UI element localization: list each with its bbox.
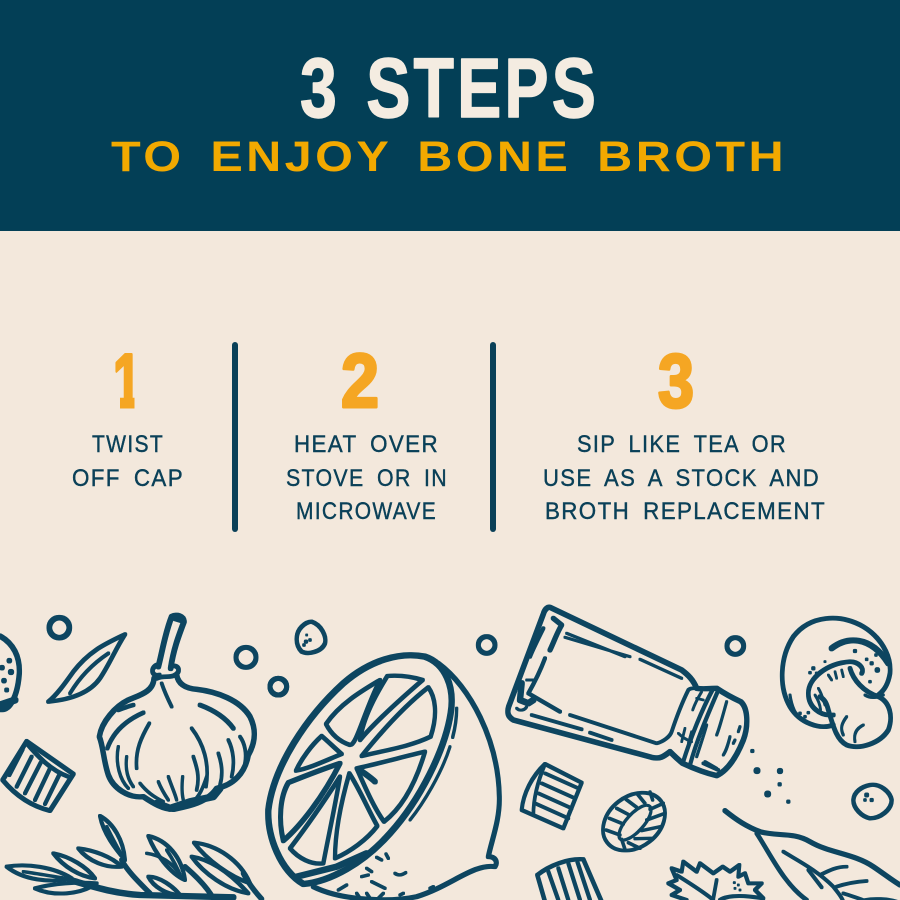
step 2: HEAT OVER (294, 431, 439, 458)
icon: pasta tube (522, 764, 582, 828)
subtitle: TO ENJOY BONE BROTH (111, 133, 787, 181)
step 3: 3 (658, 339, 694, 424)
icon: lemon slice at edge (0, 636, 19, 710)
food illustrations (0, 607, 900, 900)
icon: garlic bulb (99, 615, 254, 809)
icon: pasta ring (592, 781, 676, 863)
step 2: MICROWAVE (296, 498, 437, 525)
lemon wedges (281, 676, 435, 864)
icon: basil leaf (725, 811, 900, 900)
step 2: 2 (341, 339, 379, 424)
icon: peppercorns (236, 647, 287, 695)
icon: peppercorn (727, 638, 744, 654)
lemon flecks (338, 854, 433, 898)
icon: parsley (668, 862, 763, 900)
step 1 text: OFF CAP (72, 465, 184, 492)
divider (490, 342, 496, 532)
step 1 text (72, 431, 184, 492)
illustrations: left group (0, 615, 287, 899)
icon: salt grains (751, 749, 790, 803)
icon: peppercorn (270, 678, 287, 695)
step 3: SIP LIKE TEA OR (577, 431, 787, 458)
divider (232, 342, 238, 532)
header band (0, 0, 900, 231)
step 1 text: TWIST (92, 431, 164, 458)
icon: bay leaf (48, 634, 125, 702)
title: 3 STEPS (300, 41, 599, 135)
illustrations: lemon group (268, 622, 499, 900)
icon: mushroom (782, 618, 891, 747)
step 3 (543, 339, 826, 525)
icon: pasta piece (3, 741, 73, 811)
icon: pasta tube bottom (537, 859, 602, 900)
icon: peppercorn (853, 785, 892, 818)
illustrations: right group (508, 607, 900, 900)
number 1: 1 (113, 339, 141, 424)
icon: rosemary sprig (7, 816, 262, 899)
step 1 (72, 339, 184, 492)
step 3: USE AS A STOCK AND (543, 465, 820, 492)
icon: peppercorn (297, 622, 325, 653)
step 3: BROTH REPLACEMENT (545, 498, 826, 525)
icon: halved lemon (268, 655, 499, 900)
step 2 (286, 339, 448, 525)
step 2: STOVE OR IN (286, 465, 448, 492)
icon: peppercorn (478, 637, 495, 653)
icon: peppercorn (49, 618, 69, 638)
icon: salt shaker (508, 607, 747, 776)
